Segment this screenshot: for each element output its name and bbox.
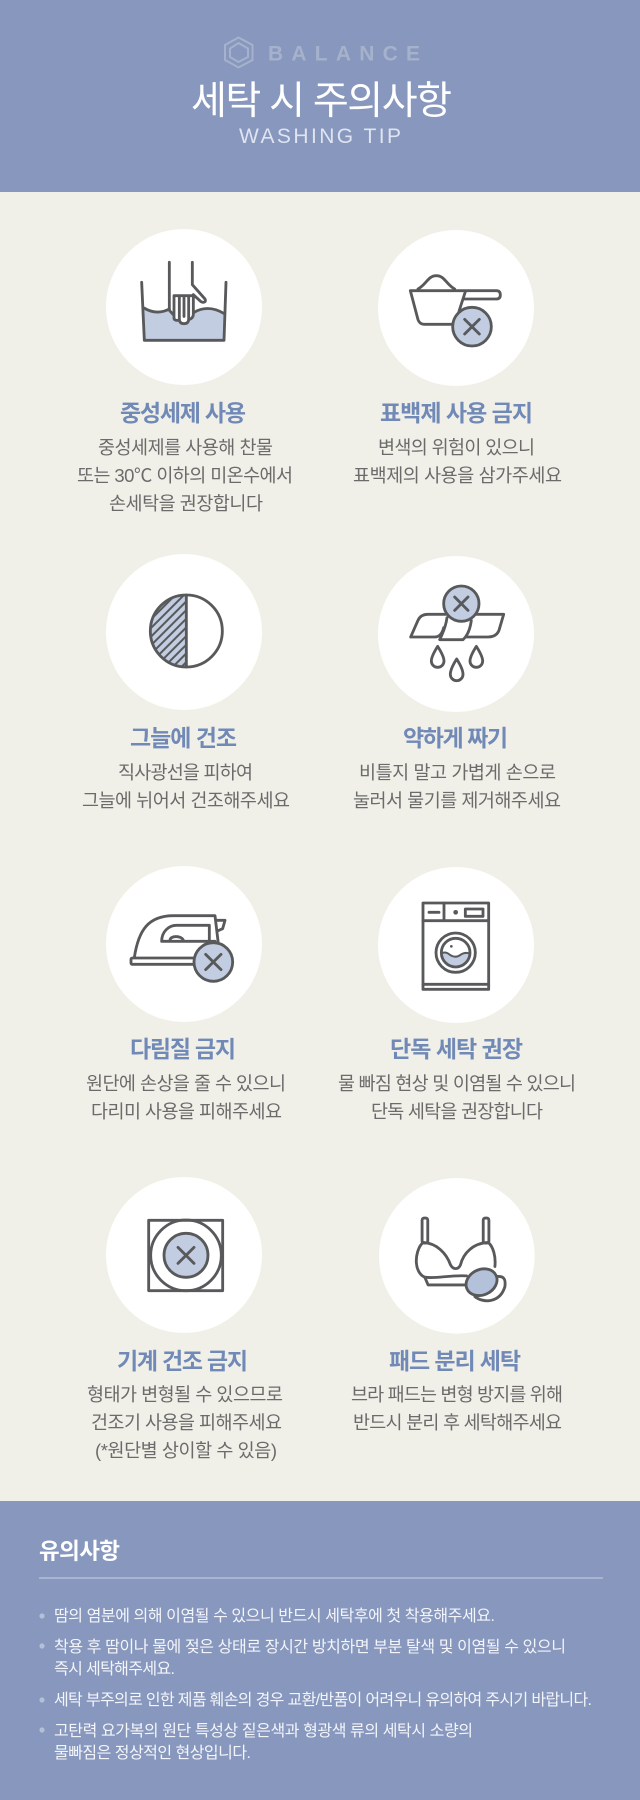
header band: [0, 0, 640, 192]
heading: 기계 건조 금지: [117, 1348, 248, 1374]
description: 표백제의 사용을 삼가주세요: [353, 465, 562, 486]
description: 단독 세탁을 권장합니다: [371, 1101, 543, 1122]
description: [338, 1073, 576, 1122]
description: 변색의 위험이 있으니: [378, 437, 535, 458]
note 4: 물빠짐은 정상적인 현상입니다.: [54, 1744, 251, 1762]
description: 또는 30℃ 이하의 미온수에서: [77, 465, 293, 486]
description: 반드시 분리 후 세탁해주세요: [353, 1412, 562, 1433]
brand logo: hexagon: [225, 38, 252, 68]
item: neutral detergent: [77, 229, 293, 514]
description: [351, 1384, 563, 1433]
description: 비틀지 말고 가볍게 손으로: [359, 762, 556, 783]
description: 물 빠짐 현상 및 이염될 수 있으니: [338, 1073, 576, 1094]
description: 손세탁을 권장합니다: [109, 493, 263, 514]
heading: 표백제 사용 금지: [380, 400, 533, 426]
icon: iron with x: [106, 866, 262, 1022]
item: wash separately: [338, 867, 576, 1122]
item: dry in shade: [82, 554, 290, 811]
icon: bra with removable pads: [379, 1178, 534, 1334]
description: [353, 762, 561, 811]
description: 원단에 손상을 줄 수 있으니: [86, 1073, 286, 1094]
heading: 다림질 금지: [130, 1036, 236, 1062]
item: no ironing: [86, 866, 286, 1122]
heading: 패드 분리 세탁: [389, 1348, 521, 1374]
note 3: 세탁 부주의로 인한 제품 훼손의 경우 교환/반품이 어려우니 유의하여 주시기 바랍니다.: [54, 1691, 592, 1709]
item: wring gently: [353, 556, 561, 811]
title: 세탁 시 주의사항: [191, 80, 452, 123]
description: [353, 437, 562, 486]
description: 형태가 변형될 수 있으므로: [87, 1384, 283, 1405]
icon: wrung cloth with drops: [378, 556, 534, 712]
heading: 단독 세탁 권장: [390, 1036, 523, 1062]
heading: 그늘에 건조: [130, 725, 237, 751]
note 4: 고탄력 요가복의 원단 특성상 짙은색과 형광색 류의 세탁시 소량의: [54, 1722, 473, 1740]
heading: 약하게 짜기: [403, 725, 508, 751]
brand name: BALANCE: [268, 42, 420, 66]
description: [77, 437, 293, 514]
icon: tumble dry with x: [106, 1177, 262, 1333]
note 1: 땀의 염분에 의해 이염될 수 있으니 반드시 세탁후에 첫 착용해주세요.: [54, 1607, 495, 1625]
description: (*원단별 상이할 수 있음): [95, 1440, 277, 1461]
description: 눌러서 물기를 제거해주세요: [353, 790, 561, 811]
description: 중성세제를 사용해 찬물: [98, 437, 273, 458]
heading: 중성세제 사용: [120, 400, 246, 426]
description: 다리미 사용을 피해주세요: [91, 1101, 282, 1122]
description: 브라 패드는 변형 방지를 위해: [351, 1384, 563, 1405]
item: no bleach: [353, 230, 562, 486]
icon: washing machine: [378, 867, 534, 1023]
icon: hand in wash basin: [106, 229, 262, 385]
note 2: 착용 후 땀이나 물에 젖은 상태로 장시간 방치하면 부분 탈색 및 이염될 수 있으니: [54, 1638, 566, 1656]
item: remove bra pads: [351, 1178, 563, 1433]
note 2: [39, 1638, 566, 1678]
icon: half shaded circle: [106, 554, 262, 710]
description: [82, 762, 290, 811]
description: [86, 1073, 286, 1122]
description: [87, 1384, 283, 1461]
icon: detergent scoop with x: [378, 230, 534, 386]
notes heading: 유의사항: [39, 1539, 120, 1564]
note 4: [39, 1722, 473, 1762]
subtitle: WASHING TIP: [239, 125, 401, 148]
description: 그늘에 뉘어서 건조해주세요: [82, 790, 290, 811]
description: 직사광선을 피하여: [118, 762, 253, 783]
note 2: 즉시 세탁해주세요.: [54, 1660, 175, 1678]
item: no machine drying: [87, 1177, 283, 1461]
description: 건조기 사용을 피해주세요: [91, 1412, 282, 1433]
panel: notes: [0, 1501, 640, 1800]
